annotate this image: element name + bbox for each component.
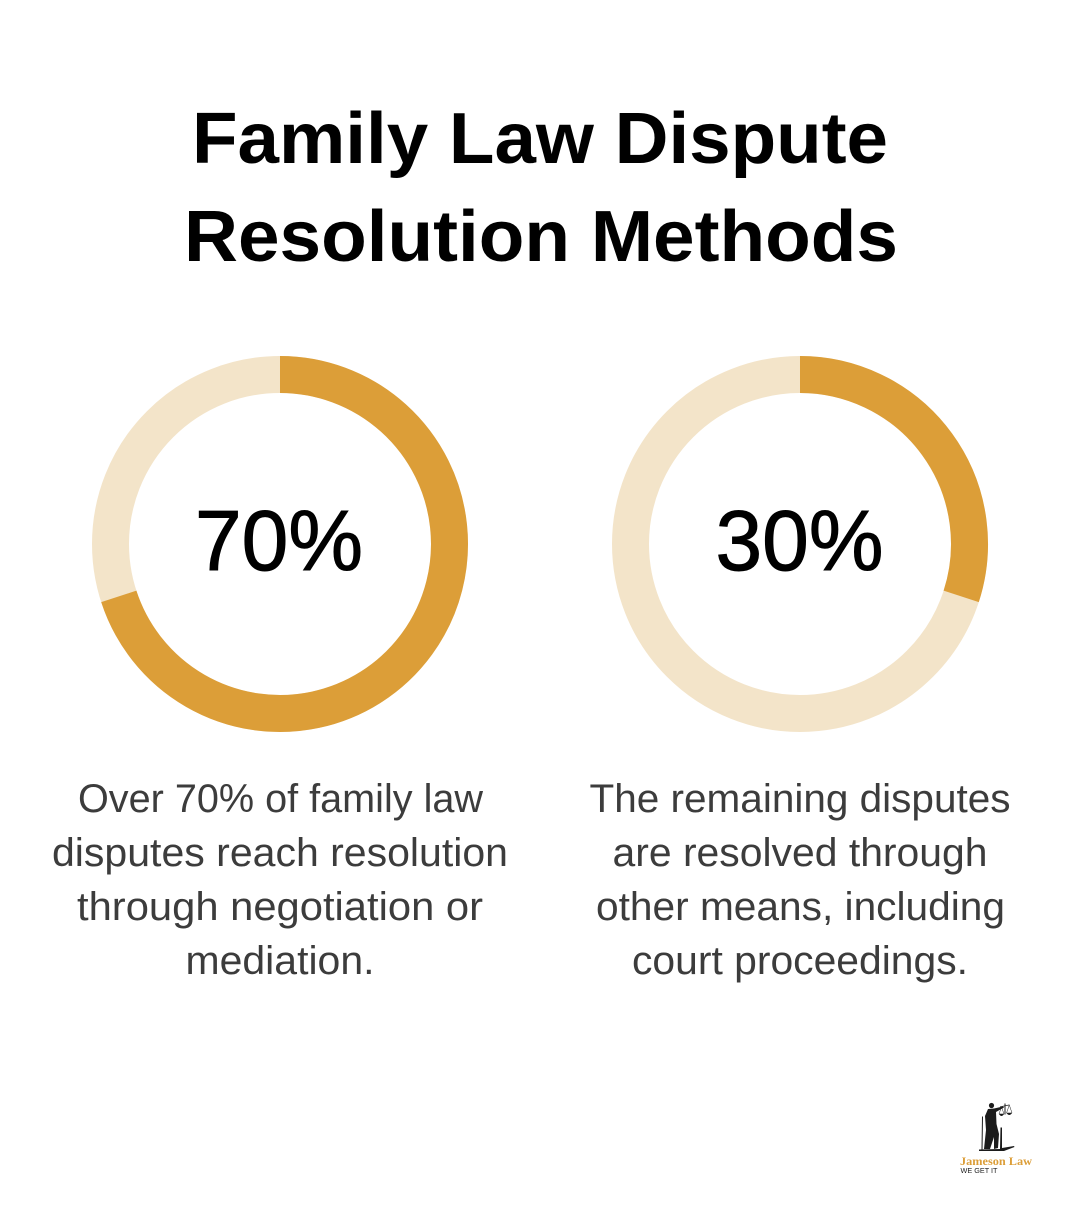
logo wordmark: Jameson Law (960, 1154, 1032, 1168)
description: 70%: mediation. (186, 939, 374, 983)
title: Resolution Methods (184, 197, 898, 277)
stat: 70%: 70% (195, 494, 363, 589)
stat: 30%: 30% (716, 494, 884, 589)
title (184, 99, 898, 277)
logo tagline: WE GET IT (960, 1168, 998, 1175)
description: 70%: disputes reach resolution (52, 831, 508, 875)
icon: lady justice (979, 1103, 1014, 1151)
description: 70%: through negotiation or (77, 885, 483, 929)
description: 70%: Over 70% of family law (78, 777, 483, 821)
description: 30%: The remaining disputes (590, 777, 1010, 821)
donut chart: 30% (630, 374, 970, 714)
panel: 70 percent negotiation or mediation (52, 374, 508, 983)
description: 70% (52, 777, 508, 983)
donut chart: 70% (110, 374, 450, 714)
description: 30%: other means, including (596, 885, 1005, 929)
title: Family Law Dispute (192, 99, 888, 179)
description: 30%: court proceedings. (632, 939, 968, 983)
description: 30%: are resolved through (612, 831, 988, 875)
panel: 30 percent other means (590, 374, 1010, 983)
logo: Jameson Law (960, 1103, 1032, 1175)
description: 30% (590, 777, 1010, 983)
